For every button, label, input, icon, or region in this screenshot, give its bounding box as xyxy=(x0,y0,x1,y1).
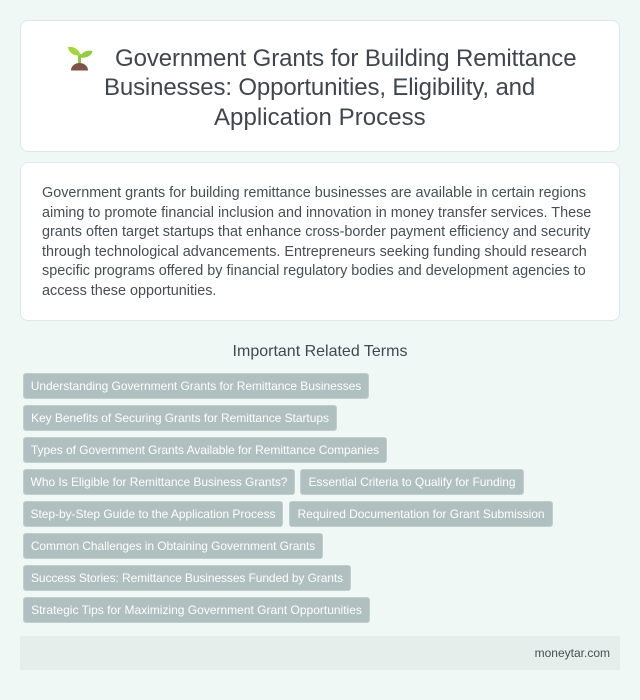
text block: introduction xyxy=(42,185,591,298)
tag xyxy=(23,469,295,495)
tag: Essential Criteria to Qualify for Funding xyxy=(308,475,516,489)
tag: Strategic Tips for Maximizing Government Grant Opportunities xyxy=(31,603,362,617)
tag xyxy=(23,565,351,591)
tag xyxy=(23,405,337,431)
title: Government Grants for Building Remittance xyxy=(115,45,576,72)
tag xyxy=(23,501,283,527)
heading: related terms: Important Related Terms xyxy=(233,343,407,360)
text block: introduction: grants often target startups that enhance cross-border payment efficiency and security xyxy=(42,224,590,240)
text block: introduction: Government grants for building remittance businesses are available in certain regions xyxy=(42,185,586,201)
tag: Step-by-Step Guide to the Application Process xyxy=(30,507,276,521)
title: Businesses: Opportunities, Eligibility, and xyxy=(104,74,535,101)
tag: Success Stories: Remittance Businesses Funded by Grants xyxy=(31,571,343,585)
tag: Types of Government Grants Available for Remittance Companies xyxy=(31,443,379,457)
icon: sprout xyxy=(68,46,92,70)
text block: introduction: specific programs offered by financial regulatory bodies and development agencies to xyxy=(42,263,586,279)
text block: introduction: through technological advancements. Entrepreneurs seeking funding should research xyxy=(42,244,587,260)
tag xyxy=(23,597,370,623)
tag: Understanding Government Grants for Remittance Businesses xyxy=(31,379,361,393)
tag xyxy=(23,533,323,559)
tag xyxy=(23,437,387,463)
panel: title card xyxy=(20,20,620,152)
tag: Required Documentation for Grant Submission xyxy=(297,507,545,521)
title: Application Process xyxy=(214,104,426,130)
tag: Common Challenges in Obtaining Government Grants xyxy=(31,539,315,553)
text block: introduction: aiming to promote financial inclusion and innovation in money transfer services. These xyxy=(42,204,591,220)
tag xyxy=(289,501,553,527)
footer text: moneytar.com xyxy=(535,646,610,660)
panel: introduction xyxy=(20,162,620,321)
tag xyxy=(300,469,524,495)
tag: Who Is Eligible for Remittance Business Grants? xyxy=(31,475,287,489)
title xyxy=(104,45,576,130)
tag: Key Benefits of Securing Grants for Remittance Startups xyxy=(31,411,329,425)
tag xyxy=(23,373,369,399)
footer bar xyxy=(20,636,620,670)
tag list: related terms xyxy=(23,373,553,623)
text block: introduction: access these opportunities. xyxy=(42,282,216,298)
